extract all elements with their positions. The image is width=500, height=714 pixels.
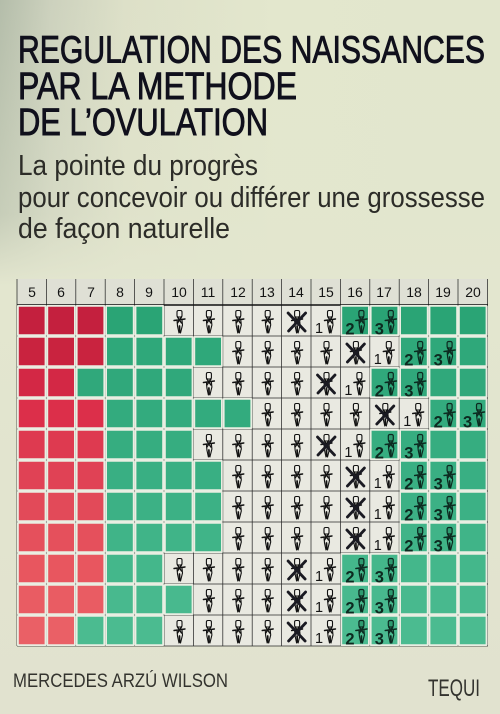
cycle row 9	[18, 554, 487, 586]
cycle row 9: 3	[375, 568, 384, 586]
cycle row 6: 1	[374, 476, 382, 492]
cycle row 3	[18, 368, 487, 400]
day number header: 12	[230, 284, 246, 300]
day number header: 11	[201, 284, 215, 300]
day number header: 10	[171, 284, 187, 300]
title	[18, 30, 485, 144]
day number header: 13	[259, 284, 275, 300]
day number header: 9	[145, 284, 153, 300]
cycle row 3: 1	[344, 383, 352, 399]
cycle row 11: 3	[375, 630, 384, 648]
cycle row 7	[18, 492, 487, 524]
day number header: 20	[465, 284, 481, 300]
day number header: 14	[288, 284, 304, 300]
cycle row 9: 1	[315, 569, 323, 585]
cycle row 11	[18, 616, 487, 648]
day number header: 19	[435, 284, 451, 300]
cycle row 8	[18, 523, 487, 556]
author name: MERCEDES ARZÚ WILSON	[13, 670, 228, 692]
cycle row 7: 2	[404, 506, 413, 524]
cycle row 6: 2	[404, 476, 413, 494]
chart: white table base	[17, 305, 488, 646]
ovulation calendar chart	[17, 279, 488, 648]
cycle row 5: 2	[375, 444, 384, 462]
cycle row 1: 3	[375, 320, 384, 338]
day number header	[28, 284, 481, 300]
subtitle	[18, 150, 485, 245]
cycle row 4: 1	[403, 414, 411, 430]
day number header: 7	[87, 284, 95, 300]
day number header: 5	[28, 284, 36, 300]
title: DE L’OVULATION	[18, 102, 268, 144]
day number header: 17	[376, 284, 392, 300]
cycle row 4: 3	[463, 414, 472, 432]
cycle row 1	[18, 306, 487, 338]
cycle row 7: 3	[434, 506, 443, 524]
cycle row 8: 2	[404, 538, 413, 556]
cycle row 8: 1	[374, 538, 382, 554]
cycle row 4: 2	[434, 414, 443, 432]
cycle row 5	[18, 430, 487, 462]
day number header: 18	[406, 284, 422, 300]
cycle row 4	[18, 399, 487, 432]
day number header: 8	[116, 284, 124, 300]
cycle row 5: 3	[404, 444, 413, 462]
cycle row 9: 2	[345, 568, 355, 586]
subtitle: La pointe du progrès	[18, 150, 258, 182]
cycle row 10	[18, 585, 487, 618]
cycle row 8: 3	[434, 538, 443, 556]
chart: header band	[17, 279, 488, 305]
subtitle: de façon naturelle	[18, 213, 230, 245]
publisher name: TEQUI	[428, 675, 480, 702]
cycle row 11: 2	[345, 630, 355, 648]
cycle row 11: 1	[315, 631, 323, 647]
cycle row 6	[18, 461, 487, 494]
title: PAR LA METHODE	[18, 66, 297, 108]
cycle row 6: 3	[434, 476, 443, 494]
cycle row 2: 2	[404, 352, 413, 370]
cycle row 5: 1	[344, 445, 352, 461]
cycle row 1: 2	[345, 320, 355, 338]
cycle row 3: 2	[375, 382, 384, 400]
cycle row 1: 1	[315, 321, 323, 337]
day number header: 15	[318, 284, 334, 300]
cycle row 2: 3	[434, 352, 443, 370]
cycle row 2: 1	[374, 352, 382, 368]
cycle row 7: 1	[374, 507, 382, 523]
cycle row 10: 2	[345, 600, 355, 618]
cycle row 3: 3	[404, 382, 413, 400]
cycle row 10: 1	[315, 600, 323, 616]
day number header: 16	[347, 284, 363, 300]
day number header: 6	[57, 284, 65, 300]
cycle row 2	[18, 337, 487, 370]
cycle row 10: 3	[375, 600, 384, 618]
